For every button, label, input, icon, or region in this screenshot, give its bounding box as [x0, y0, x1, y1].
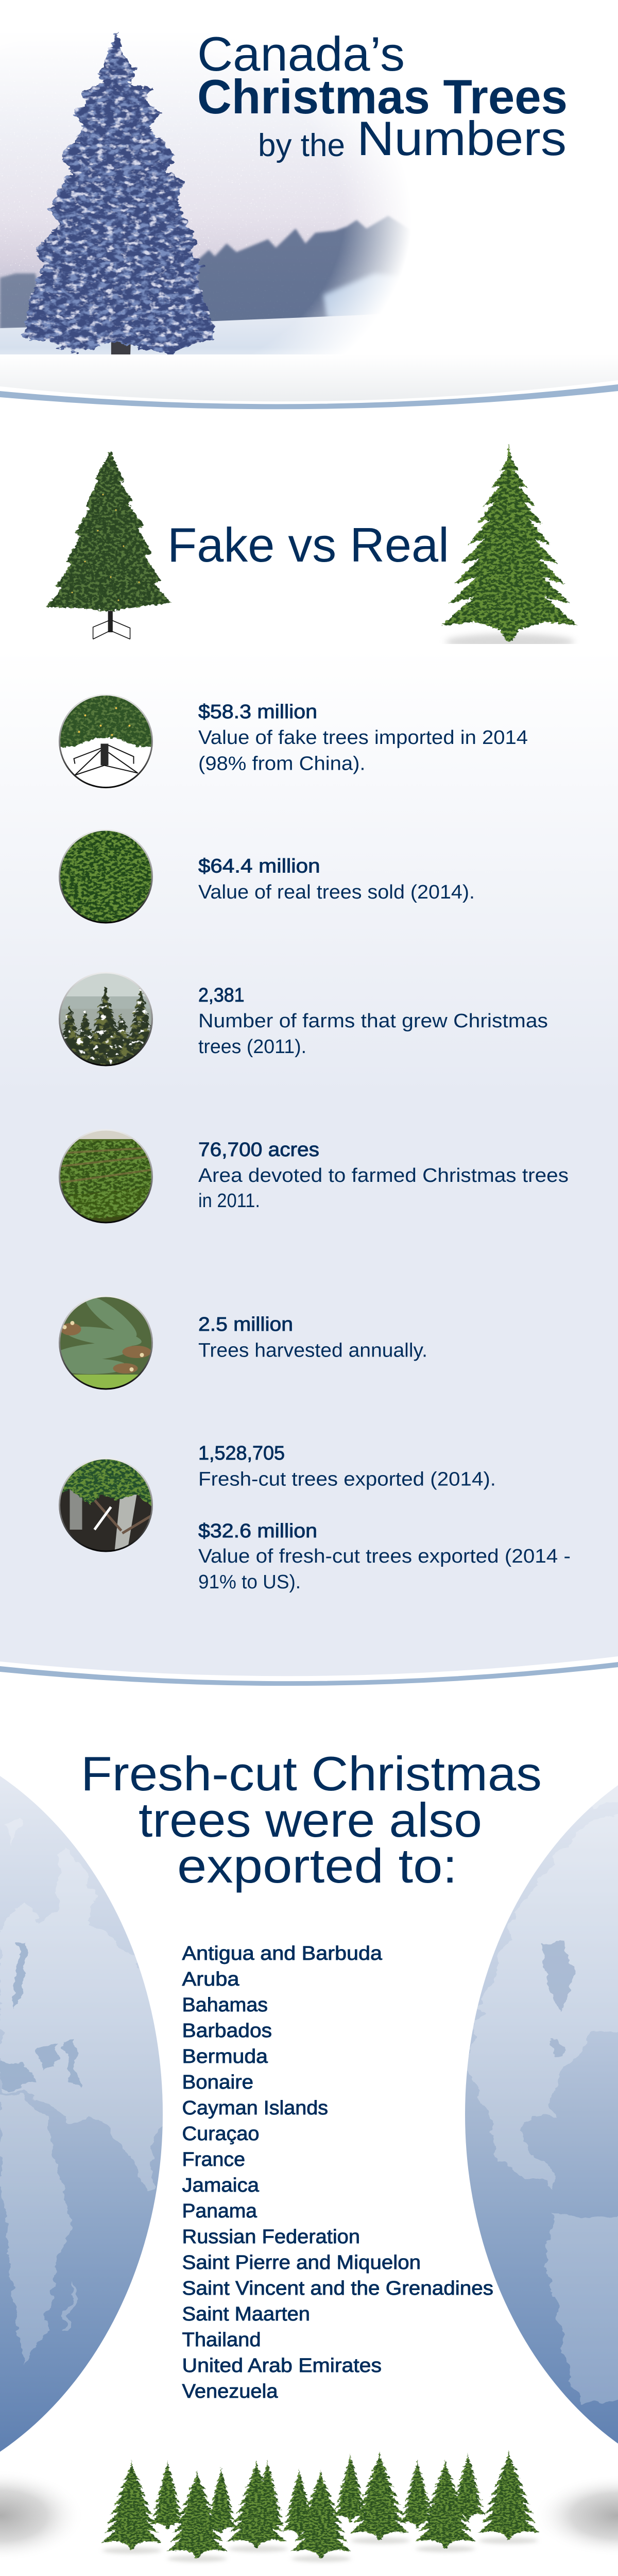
- text: fresh-cut figures: [198, 1443, 571, 1593]
- icon: artificial tree with stand: [46, 451, 171, 639]
- text: 76,700 acres: Area devoted to farmed Christmas trees: [198, 1165, 569, 1187]
- text: fresh-cut figures: $32.6 million: [198, 1520, 317, 1542]
- list: export countries: [182, 1943, 493, 2402]
- header scene: snowy landscape: [0, 32, 408, 354]
- text: $64.4 million: [198, 855, 475, 903]
- list: export countries: France: [182, 2149, 245, 2171]
- icon: snowy blue spruce tree: [24, 32, 215, 377]
- title: Canada’s: [197, 27, 405, 81]
- text: 2.5 million: Trees harvested annually.: [198, 1340, 427, 1361]
- icon: farmed rows of trees in circle: [59, 1130, 153, 1223]
- list: export countries: Venezuela: [182, 2381, 278, 2402]
- list: export countries: Cayman Islands: [182, 2097, 328, 2119]
- text: $58.3 million: [198, 701, 528, 775]
- text: 2,381: trees (2011).: [198, 1036, 306, 1058]
- heading: fresh-cut exports: exported to:: [177, 1839, 457, 1893]
- list: export countries: Saint Maarten: [182, 2303, 310, 2325]
- list: export countries: Antigua and Barbuda: [182, 1943, 383, 1964]
- list: export countries: Russian Federation: [182, 2226, 360, 2248]
- stat 3: farms: [55, 968, 548, 1071]
- panel: statistics background with curved divider: [0, 644, 618, 1686]
- text: 2,381: 2,381: [198, 985, 244, 1006]
- text: fresh-cut figures: Value of fresh-cut trees exported (2014 -: [198, 1546, 571, 1567]
- list: export countries: Aruba: [182, 1969, 239, 1990]
- list: export countries: Saint Vincent and the Grenadines: [182, 2278, 493, 2299]
- heading: fresh-cut exports: Fresh-cut Christmas: [81, 1747, 542, 1801]
- list: export countries: Saint Pierre and Miquelon: [182, 2252, 421, 2274]
- text: fresh-cut figures: 91% to US).: [198, 1571, 301, 1593]
- stat 4: acres: [59, 1130, 568, 1223]
- text: 2.5 million: 2.5 million: [198, 1314, 293, 1335]
- text: $58.3 million: Value of fake trees imported in 2014: [198, 727, 528, 749]
- section fade and curved divider 1: [0, 354, 618, 412]
- title: by the: [258, 128, 345, 163]
- list: export countries: Bermuda: [182, 2046, 268, 2067]
- icon: fresh-cut tree trunks in circle: [59, 1459, 153, 1552]
- text: $58.3 million: (98% from China).: [198, 753, 366, 775]
- title: [197, 27, 568, 165]
- panel: fake vs real: [46, 444, 577, 650]
- icon: real tree: [441, 444, 577, 650]
- title: Numbers: [357, 111, 566, 165]
- text: $64.4 million: $64.4 million: [198, 855, 320, 877]
- list: export countries: Jamaica: [182, 2175, 260, 2196]
- text: 2,381: [198, 985, 548, 1058]
- text: 76,700 acres: in 2011.: [198, 1190, 260, 1212]
- globe: left (Europe, Africa, Asia): [0, 1776, 163, 2452]
- illustration: row of fir trees with side shadows: [0, 2450, 618, 2562]
- list: export countries: United Arab Emirates: [182, 2355, 382, 2377]
- icon: netted harvested trees in circle: [59, 1297, 153, 1390]
- text: 76,700 acres: 76,700 acres: [198, 1139, 319, 1161]
- text: 2,381: Number of farms that grew Christmas: [198, 1010, 548, 1032]
- text: 76,700 acres: [198, 1139, 569, 1212]
- icon: fake tree base in circle: [59, 694, 153, 788]
- stat 6: exported: [55, 1443, 571, 1593]
- text: $64.4 million: Value of real trees sold (2014).: [198, 882, 475, 903]
- list: export countries: Bahamas: [182, 1994, 268, 2016]
- list: export countries: Curaçao: [182, 2123, 260, 2145]
- icon: snowy tree farm in circle: [59, 972, 153, 1066]
- text: 2.5 million: [198, 1314, 427, 1361]
- list: export countries: Bonaire: [182, 2072, 253, 2093]
- text: $58.3 million: $58.3 million: [198, 701, 317, 723]
- icon: real tree branches in circle: [59, 829, 153, 923]
- stat 5: harvested: [59, 1297, 425, 1390]
- stat 2: real trees sold: [59, 829, 473, 923]
- text: fresh-cut figures: Fresh-cut trees exported (2014).: [198, 1468, 496, 1490]
- list: export countries: Barbados: [182, 2020, 272, 2042]
- list: export countries: Panama: [182, 2200, 258, 2222]
- text: fresh-cut figures: 1,528,705: [198, 1443, 285, 1464]
- heading: fresh-cut exports: trees were also: [139, 1793, 482, 1847]
- globe: right (the Americas): [465, 1785, 618, 2444]
- stat 1: fake trees imported: [55, 689, 528, 787]
- heading: fake vs real: Fake vs Real: [167, 518, 449, 572]
- title: Christmas Trees: [197, 70, 568, 124]
- list: export countries: Thailand: [182, 2329, 261, 2351]
- heading: fresh-cut exports: [81, 1747, 542, 1893]
